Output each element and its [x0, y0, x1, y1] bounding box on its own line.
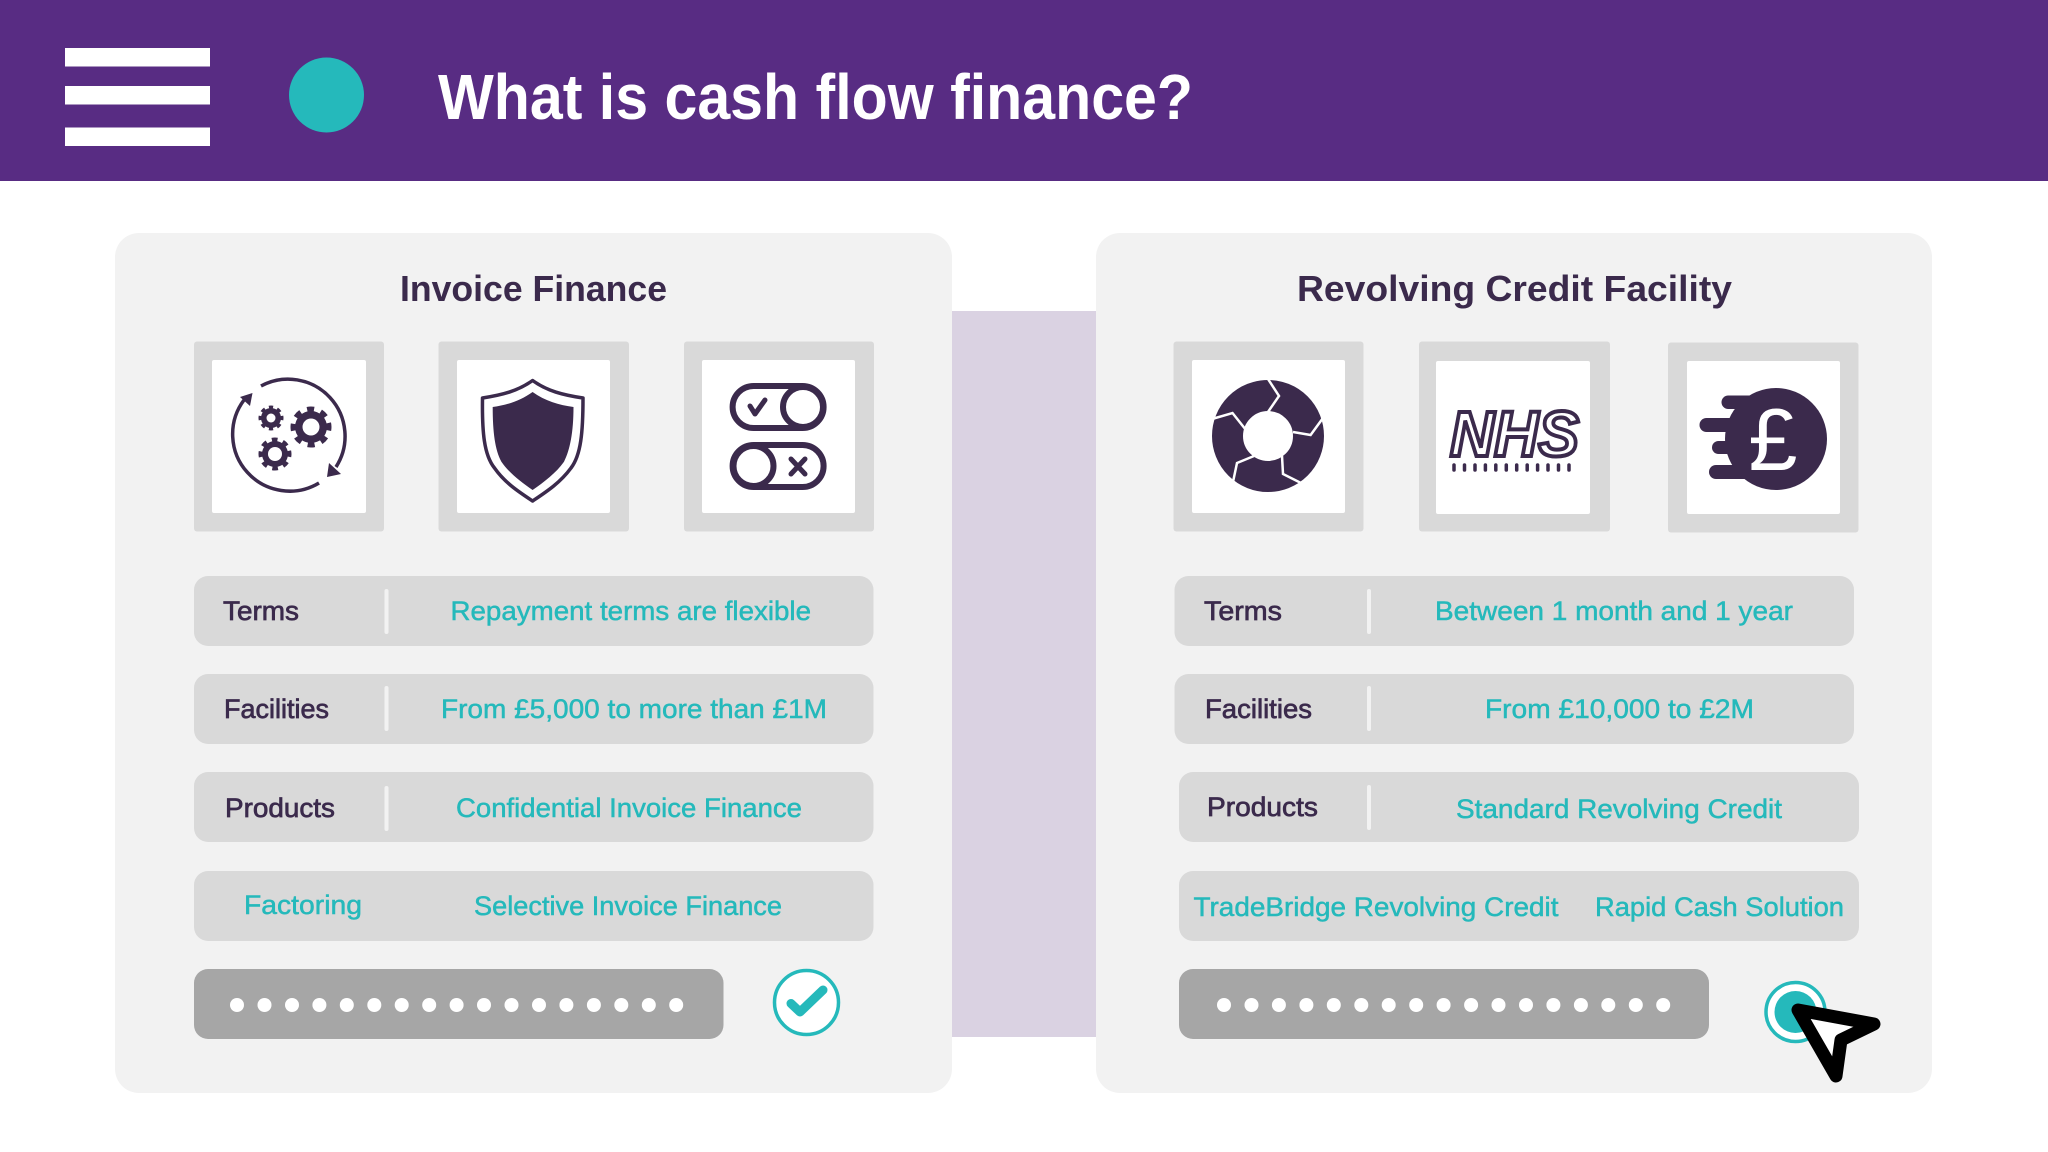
- row: products: Products: [1207, 792, 1318, 822]
- row: products: Products: [225, 793, 335, 823]
- row: terms: Terms: [223, 596, 299, 626]
- row: terms: [1174, 576, 1854, 646]
- icon: teal circle: [289, 58, 364, 132]
- icon: NHS logo: [1419, 342, 1610, 532]
- row: terms: Between 1 month and 1 year: [1435, 596, 1793, 626]
- panel: revolving credit facility: [1096, 233, 1932, 1093]
- row: product names: Factoring: [244, 890, 362, 920]
- row: products: [194, 772, 874, 842]
- icon: shield: [438, 342, 629, 532]
- row: facilities: From £5,000 to more than £1M: [441, 694, 827, 724]
- row: products: Standard Revolving Credit: [1456, 794, 1783, 824]
- heading: revolving credit facility: Revolving Credit Facility: [1297, 268, 1732, 309]
- password field: [1179, 969, 1709, 1039]
- icon: moving pound coin: [1668, 342, 1858, 532]
- icon: NHS logo: NHS: [1450, 398, 1579, 470]
- connector band between panels: [950, 311, 1098, 1037]
- title: What is cash flow finance?: [438, 61, 1193, 133]
- icon: gears in cycle: [194, 342, 384, 532]
- icon: radio button with cursor: [1766, 982, 1874, 1076]
- row: terms: [194, 576, 874, 646]
- row: product names: TradeBridge Revolving Credit: [1194, 892, 1559, 922]
- row: terms: Terms: [1204, 596, 1282, 626]
- row: products: Confidential Invoice Finance: [456, 793, 802, 823]
- row: facilities: From £10,000 to £2M: [1485, 694, 1754, 724]
- row: product names: [1179, 871, 1859, 941]
- row: products: [1179, 772, 1859, 842]
- icon: cursor arrow: [1798, 1010, 1874, 1076]
- header bar: [0, 0, 2048, 181]
- row: facilities: [194, 674, 874, 744]
- icon: toggle switches: [684, 342, 874, 532]
- row: terms: Repayment terms are flexible: [450, 596, 811, 626]
- panel: invoice finance: [115, 233, 952, 1093]
- row: facilities: Facilities: [1205, 694, 1312, 724]
- row: facilities: [1174, 674, 1854, 744]
- icon: segmented ring: [1174, 342, 1364, 532]
- password field: [194, 969, 724, 1039]
- row: product names: Rapid Cash Solution: [1595, 892, 1844, 922]
- row: product names: Selective Invoice Finance: [474, 891, 782, 921]
- row: product names: [194, 871, 874, 941]
- icon: menu bars: [65, 48, 210, 146]
- icon: moving pound coin: £: [1749, 390, 1797, 489]
- icon: check button: [774, 970, 838, 1034]
- row: facilities: Facilities: [224, 694, 329, 724]
- heading: invoice finance: Invoice Finance: [400, 268, 667, 309]
